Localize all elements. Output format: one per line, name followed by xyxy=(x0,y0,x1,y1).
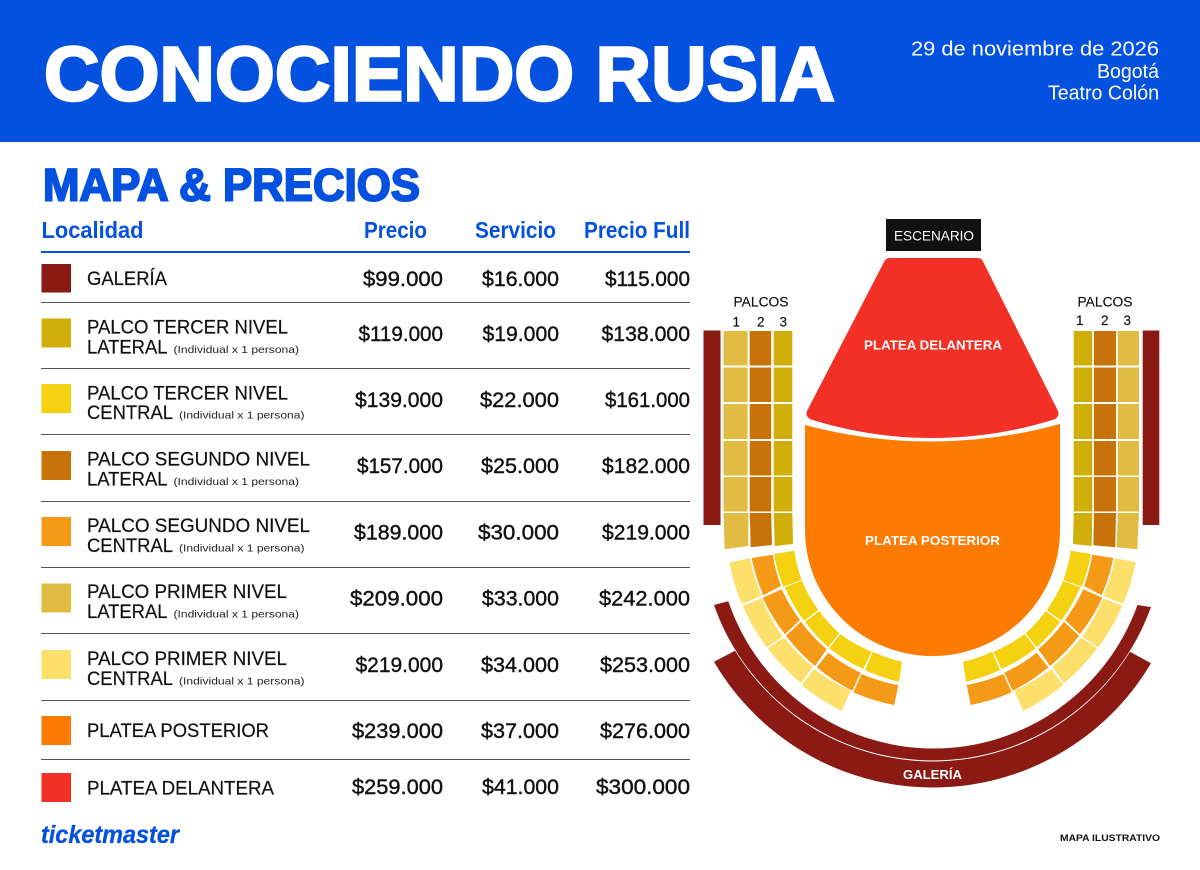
table header: Precio xyxy=(364,217,427,243)
row: palco segundo nivel lateral xyxy=(42,450,690,490)
row: platea delantera: $259.000 xyxy=(352,776,443,799)
row: palco primer nivel central: $219.000 xyxy=(356,654,443,677)
galeria outer arc xyxy=(714,651,1151,787)
row: palco segundo nivel central: PALCO SEGUNDO NIVEL xyxy=(87,516,310,537)
row: palco tercer nivel central: PALCO TERCER NIVEL xyxy=(87,384,288,404)
galeria outer arc: GALERÍA xyxy=(903,767,963,782)
row: palco tercer nivel lateral: $19.000 xyxy=(482,323,559,346)
row: palco primer nivel central xyxy=(42,649,690,690)
left palcos label: 2 xyxy=(757,314,765,330)
row: galeria: $16.000 xyxy=(482,268,559,291)
row: palco primer nivel lateral xyxy=(42,582,690,623)
row: platea posterior: $276.000 xyxy=(600,720,690,743)
right palcos label: 2 xyxy=(1101,313,1109,328)
note: mapa ilustrativo: MAPA ILUSTRATIVO xyxy=(1060,833,1160,844)
row: palco primer nivel lateral: $209.000 xyxy=(350,588,443,610)
row: palco primer nivel central: $34.000 xyxy=(481,654,559,677)
table header xyxy=(41,217,690,253)
row: platea delantera: PLATEA DELANTERA xyxy=(87,778,274,800)
table header: Localidad xyxy=(42,217,144,243)
row: platea posterior: PLATEA POSTERIOR xyxy=(87,721,269,742)
left palcos label: PALCOS xyxy=(734,294,788,310)
left palcos column grid xyxy=(724,331,793,549)
left palcos label: 3 xyxy=(780,314,787,330)
galeria inner arc xyxy=(714,601,1151,760)
row: palco primer nivel central: $253.000 xyxy=(600,654,690,677)
left galeria bar xyxy=(704,330,720,525)
section heading: MAPA & PRECIOS xyxy=(43,160,420,210)
stage: ESCENARIO xyxy=(894,228,974,244)
platea delantera section: PLATEA DELANTERA xyxy=(864,338,1003,352)
row: palco segundo nivel central: $30.000 xyxy=(478,522,559,544)
row: palco tercer nivel lateral: (Individual x 1 persona) xyxy=(174,344,299,356)
event details: Bogotá xyxy=(1097,61,1160,83)
row: palco segundo nivel lateral: LATERAL xyxy=(87,470,168,490)
row: palco tercer nivel lateral: $119.000 xyxy=(358,323,443,346)
row: palco primer nivel central: CENTRAL xyxy=(87,669,173,690)
row: palco tercer nivel central: $22.000 xyxy=(480,389,559,412)
row: palco segundo nivel central xyxy=(42,516,690,557)
event details: Teatro Colón xyxy=(1048,82,1159,104)
row: palco segundo nivel lateral: $182.000 xyxy=(602,455,690,478)
table header: Servicio xyxy=(475,217,556,243)
row: palco primer nivel central: (Individual x 1 persona) xyxy=(179,676,304,688)
stage xyxy=(886,219,981,251)
right palcos label: PALCOS xyxy=(1078,294,1132,310)
row: palco segundo nivel central: (Individual x 1 persona) xyxy=(179,542,304,554)
row: palco primer nivel lateral: (Individual x 1 persona) xyxy=(174,608,299,620)
row: galeria: GALERÍA xyxy=(87,269,167,290)
row: palco segundo nivel central: $219.000 xyxy=(602,522,690,544)
table header: Precio Full xyxy=(584,217,690,243)
row: palco tercer nivel central xyxy=(42,384,690,424)
left curved palcos xyxy=(729,551,902,711)
row: palco primer nivel lateral: LATERAL xyxy=(87,602,168,623)
title: CONOCIENDO RUSIA xyxy=(44,32,835,118)
right palcos column grid xyxy=(1073,331,1139,549)
event details: 29 de noviembre de 2026 xyxy=(911,38,1159,60)
row: palco primer nivel central: PALCO PRIMER NIVEL xyxy=(87,649,287,670)
row: palco primer nivel lateral: $242.000 xyxy=(599,588,690,610)
row: palco tercer nivel lateral xyxy=(42,318,690,358)
logo: ticketmaster: ticketmaster xyxy=(41,821,180,849)
row: palco tercer nivel lateral: PALCO TERCER NIVEL xyxy=(87,318,288,338)
row: palco segundo nivel lateral: $25.000 xyxy=(481,455,559,478)
row: platea delantera xyxy=(42,773,690,802)
row: palco primer nivel lateral: PALCO PRIMER NIVEL xyxy=(87,582,287,603)
right curved palcos xyxy=(963,551,1136,711)
platea delantera section xyxy=(806,258,1058,438)
price table xyxy=(41,217,690,802)
row: palco tercer nivel lateral: $138.000 xyxy=(602,323,690,346)
right galeria bar xyxy=(1143,330,1159,525)
platea posterior section xyxy=(805,424,1060,656)
left palcos label: 1 xyxy=(732,314,740,330)
row: palco tercer nivel central: $161.000 xyxy=(605,389,690,412)
row: platea posterior xyxy=(42,716,690,745)
row: palco segundo nivel central: $189.000 xyxy=(354,522,443,544)
row: palco segundo nivel lateral: $157.000 xyxy=(357,455,443,478)
event details xyxy=(911,38,1160,104)
right palcos label: 3 xyxy=(1124,313,1131,328)
right palcos label: 1 xyxy=(1076,313,1084,328)
row: palco tercer nivel central: CENTRAL xyxy=(87,403,173,424)
row: platea posterior: $239.000 xyxy=(352,720,443,743)
row: palco tercer nivel central: (Individual x 1 persona) xyxy=(179,410,304,422)
row: galeria: $99.000 xyxy=(363,268,443,291)
row: platea delantera: $41.000 xyxy=(482,776,559,799)
row: platea posterior: $37.000 xyxy=(481,720,559,743)
row: palco segundo nivel lateral: PALCO SEGUNDO NIVEL xyxy=(87,450,310,470)
right palcos label xyxy=(1076,294,1132,328)
left palcos label xyxy=(732,294,788,330)
row: palco tercer nivel lateral: LATERAL xyxy=(87,338,168,358)
seating map xyxy=(704,219,1159,787)
row: palco tercer nivel central: $139.000 xyxy=(355,389,443,412)
row: palco primer nivel lateral: $33.000 xyxy=(482,588,559,610)
row: platea delantera: $300.000 xyxy=(596,776,690,799)
row: palco segundo nivel central: CENTRAL xyxy=(87,536,173,557)
row: galeria: $115.000 xyxy=(605,268,690,291)
platea posterior section: PLATEA POSTERIOR xyxy=(865,533,1001,548)
row: galeria xyxy=(42,264,690,292)
row: palco segundo nivel lateral: (Individual x 1 persona) xyxy=(174,476,299,488)
header banner xyxy=(0,0,1200,142)
